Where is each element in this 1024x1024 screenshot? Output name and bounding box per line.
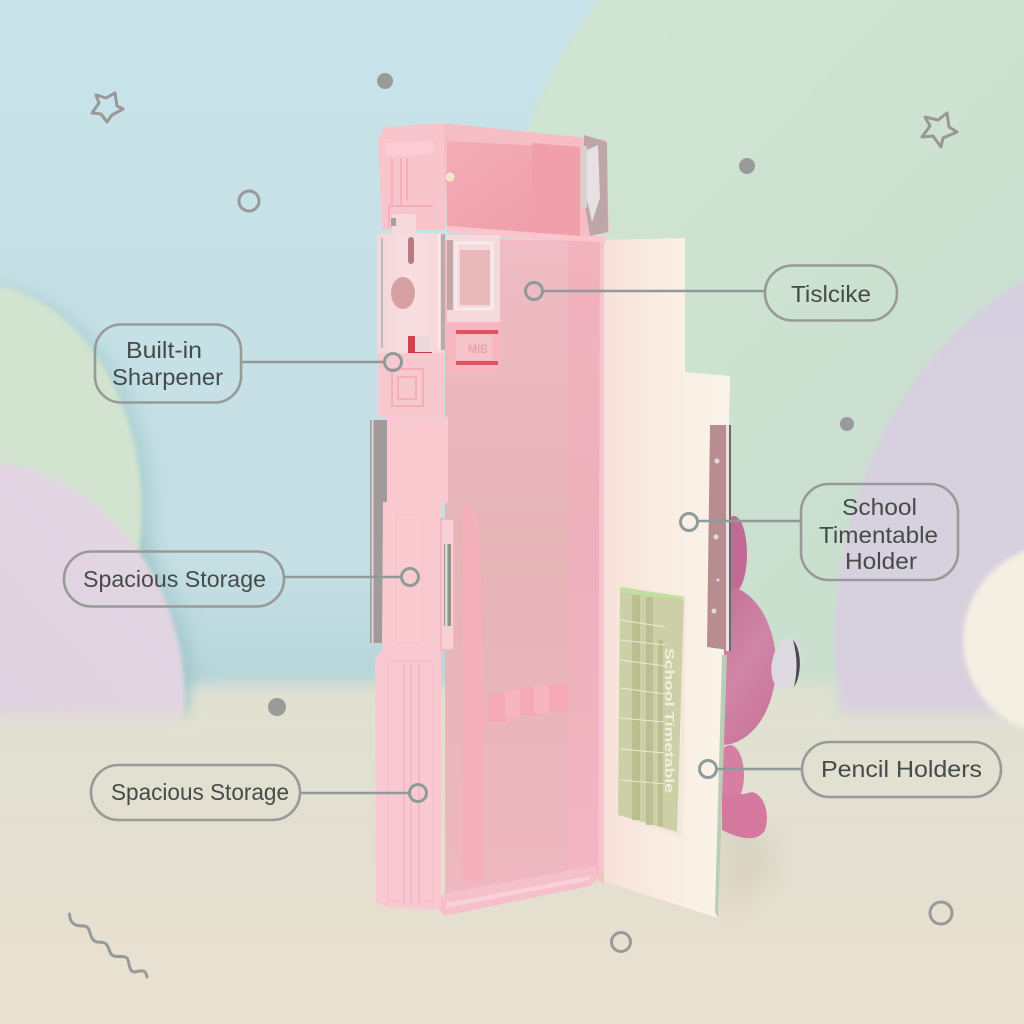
interior right wall: [568, 240, 602, 882]
metal clip on lid: [707, 425, 731, 651]
callout: Built-in Sharpener: [95, 324, 402, 402]
left wall mid section: [382, 502, 442, 650]
callout: Spacious Storage lower: Spacious Storage: [111, 779, 289, 805]
lower sharpener block: [378, 353, 444, 417]
interior back wall: [445, 240, 570, 905]
decorative dots and rings: [239, 73, 952, 952]
callout: Spacious Storage lower: [91, 765, 426, 820]
small screw: [444, 172, 456, 182]
left wall lower section: [375, 650, 441, 910]
callout: Built-in Sharpener: Built-in: [126, 337, 202, 363]
icon: star right: [922, 113, 957, 147]
callout: Spacious Storage upper: Spacious Storage: [83, 566, 266, 592]
pencil divider: [462, 503, 484, 883]
top right hinge: [584, 135, 608, 236]
pink case body: [370, 123, 609, 916]
callout: Tislcike: Tislcike: [791, 281, 871, 307]
pencil holder comb: [488, 684, 568, 722]
callout: School Timentable Holder: [680, 484, 958, 580]
left wall upper section: [388, 417, 448, 503]
callout: Built-in Sharpener: Sharpener: [112, 364, 223, 390]
upper compartment: [443, 123, 609, 237]
sliding switch: MIB: [468, 342, 488, 356]
timetable holder: School Timetable: [662, 648, 677, 793]
timetable holder: [617, 585, 686, 838]
callout: School Timentable Holder: School: [842, 494, 917, 520]
transparent sharpener chamber: [377, 214, 445, 355]
side clip window: [441, 519, 454, 650]
sliding switch: [447, 322, 500, 372]
callout: Spacious Storage upper: [64, 552, 418, 606]
sharpener top block: [378, 123, 446, 230]
icon: squiggle: [70, 914, 147, 977]
transparent side window: [447, 235, 500, 322]
bottom lip: [436, 866, 597, 916]
left metal hinge: [370, 420, 387, 643]
callout: Tislcike: [526, 266, 897, 320]
callout: Pencil Holders: Pencil Holders: [821, 756, 982, 782]
callout: School Timentable Holder: Timentable: [819, 522, 938, 548]
shadow under case: [716, 800, 775, 918]
callout: School Timentable Holder: Holder: [845, 548, 917, 574]
toy bear behind lid: [668, 516, 805, 838]
open lid panel: [598, 238, 731, 918]
icon: star left: [92, 93, 123, 122]
callout: Pencil Holders: [700, 742, 1001, 797]
